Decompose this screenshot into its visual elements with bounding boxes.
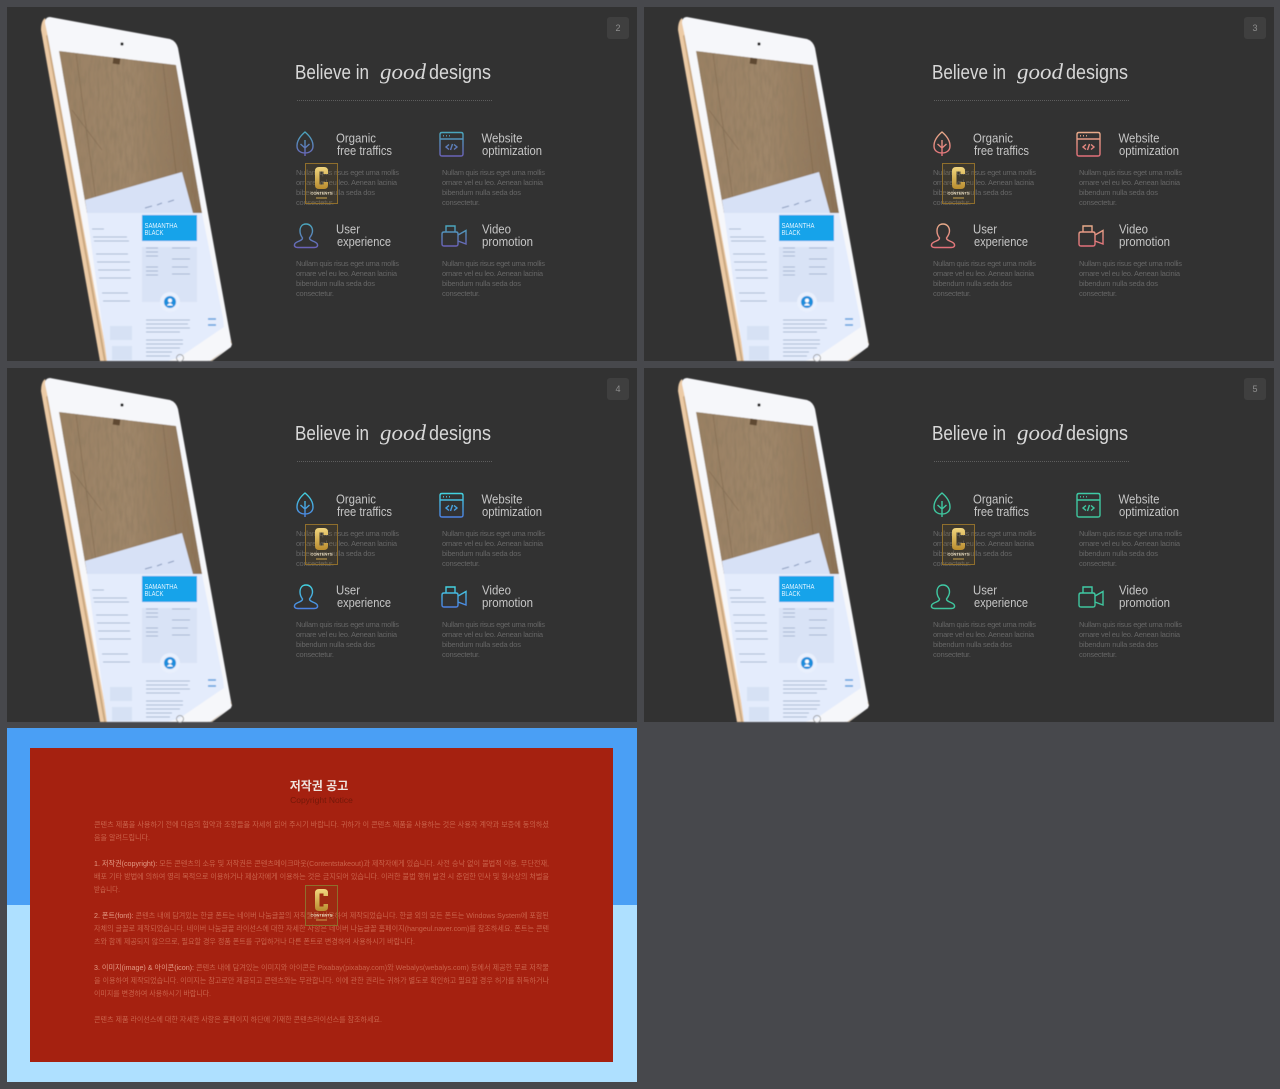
watermark: CONTENTS [948, 190, 970, 196]
icon: video camera [442, 226, 466, 246]
label: user experience: User [336, 222, 361, 236]
page number [1244, 378, 1266, 400]
label: user experience: User [973, 222, 998, 236]
tablet mockup: SAMANTHA [782, 584, 815, 591]
tablet mockup [678, 378, 869, 722]
description: consectetur. [1079, 198, 1117, 207]
notice text: 받습니다. [94, 885, 120, 894]
description: Nullam quis risus eget urna mollis [296, 620, 399, 629]
icon: user [294, 585, 318, 608]
description: ornare vel eu leo. Aenean lacinia [933, 178, 1035, 187]
description: bibendum nulla seda dos [296, 549, 375, 558]
notice text [94, 820, 549, 1024]
label: website optimization: optimization [482, 143, 542, 158]
page number: 5 [1252, 384, 1258, 394]
icon: user [931, 585, 955, 608]
description: consectetur. [296, 198, 334, 207]
icon: browser code [1077, 494, 1100, 517]
label: website optimization: optimization [482, 504, 542, 519]
watermark: CONTENTS [310, 552, 333, 556]
icon: browser code [1077, 132, 1100, 156]
tablet mockup: SAMANTHA [144, 223, 178, 230]
watermark: CONTENTS [948, 552, 970, 556]
page number [1244, 17, 1266, 39]
description: bibendum nulla seda dos [933, 188, 1012, 197]
icon: browser code [440, 494, 463, 517]
notice text: 1. 저작권(copyright): 모든 콘텐츠의 소유 및 저작권은 콘텐츠메이크마웃(Contentstakeout)과 제작자에게 있습니다. 사전 승낙 없이 불법적 이용, 무단전재, [94, 859, 549, 868]
page number [607, 378, 629, 400]
label: website optimization: optimization [1119, 143, 1179, 158]
watermark [306, 164, 338, 204]
label: organic free traffics: free traffics [337, 504, 392, 519]
heading: Believe in [295, 62, 369, 84]
description: consectetur. [1079, 650, 1117, 659]
icon: user [931, 224, 955, 248]
description: Nullam quis risus eget urna mollis [442, 168, 545, 177]
description: ornare vel eu leo. Aenean lacinia [442, 630, 544, 639]
description: bibendum nulla seda dos [933, 640, 1012, 649]
icon: leaf [934, 132, 950, 156]
tablet mockup [41, 17, 232, 362]
description: consectetur. [296, 289, 334, 298]
description: bibendum nulla seda dos [1079, 279, 1158, 288]
description: consectetur. [933, 650, 971, 659]
heading: designs [1066, 62, 1128, 84]
description: Nullam quis risus eget urna mollis [1079, 168, 1182, 177]
label: video promotion: promotion [482, 234, 533, 249]
description: consectetur. [1079, 289, 1117, 298]
description: Nullam quis risus eget urna mollis [1079, 620, 1182, 629]
description: Nullam quis risus eget urna mollis [933, 168, 1036, 177]
description: bibendum nulla seda dos [1079, 640, 1158, 649]
icon: leaf [297, 493, 313, 517]
icon: leaf [934, 493, 950, 517]
icon: video camera [1079, 226, 1103, 246]
label: user experience: experience [974, 595, 1028, 610]
tablet mockup: BLACK [782, 230, 801, 237]
description: Nullam quis risus eget urna mollis [296, 529, 399, 538]
description: consectetur. [933, 198, 971, 207]
tablet mockup: BLACK [144, 591, 164, 598]
page number [607, 17, 629, 39]
label: organic free traffics: free traffics [337, 143, 392, 158]
subtitle: Copyright Notice [290, 795, 353, 805]
description: ornare vel eu leo. Aenean lacinia [442, 539, 544, 548]
watermark: CONTENTS [310, 190, 333, 196]
tablet mockup: SAMANTHA [782, 223, 815, 230]
description: bibendum nulla seda dos [296, 279, 375, 288]
description: Nullam quis risus eget urna mollis [1079, 529, 1182, 538]
label: organic free traffics: Organic [336, 492, 376, 506]
description: bibendum nulla seda dos [296, 188, 375, 197]
description: bibendum nulla seda dos [1079, 549, 1158, 558]
label: user experience: User [973, 582, 998, 598]
page number: 4 [615, 384, 621, 394]
description: consectetur. [1079, 559, 1117, 568]
description: ornare vel eu leo. Aenean lacinia [933, 269, 1035, 278]
description: ornare vel eu leo. Aenean lacinia [1079, 539, 1181, 548]
tablet mockup [41, 378, 232, 722]
label: website optimization: Website [1118, 130, 1160, 146]
heading: designs [1066, 423, 1128, 445]
description: consectetur. [933, 559, 971, 568]
description: bibendum nulla seda dos [442, 279, 521, 288]
heading: good [380, 59, 427, 84]
label: website optimization: optimization [1119, 504, 1179, 519]
title: 저작권 공고 [290, 778, 348, 793]
description: Nullam quis risus eget urna mollis [442, 620, 545, 629]
heading: Believe in [295, 423, 369, 445]
notice text: 3. 이미지(image) & 아이콘(icon): 콘텐츠 내에 담겨있는 이미지와 아이콘은 Pixabay(pixabay.com)와 Webalys(webalys.com) 등에서 제공한 무료 저작물 [94, 963, 549, 972]
description: Nullam quis risus eget urna mollis [442, 529, 545, 538]
label: video promotion: promotion [1119, 234, 1170, 249]
heading [295, 420, 491, 445]
tablet mockup: SAMANTHA [144, 584, 178, 591]
description: bibendum nulla seda dos [442, 640, 521, 649]
heading: good [1017, 59, 1064, 84]
watermark: CONTENTS [310, 912, 333, 918]
description: ornare vel eu leo. Aenean lacinia [296, 539, 398, 548]
heading: good [1017, 420, 1064, 445]
description: consectetur. [442, 289, 480, 298]
icon: leaf [297, 132, 313, 156]
watermark [942, 524, 974, 564]
panel: copyright notice [7, 728, 637, 1082]
description: Nullam quis risus eget urna mollis [296, 168, 399, 177]
description: ornare vel eu leo. Aenean lacinia [296, 630, 398, 639]
label: website optimization: Website [482, 492, 522, 506]
icon: video camera [1079, 587, 1103, 607]
heading [932, 420, 1128, 445]
label: video promotion: promotion [1119, 595, 1170, 610]
heading: designs [429, 62, 491, 84]
tablet mockup [678, 17, 869, 362]
description: consectetur. [933, 289, 971, 298]
label: video promotion: Video [1119, 582, 1148, 598]
description: Nullam quis risus eget urna mollis [933, 529, 1036, 538]
label: organic free traffics: free traffics [974, 504, 1029, 519]
tablet mockup: BLACK [144, 230, 164, 237]
description: Nullam quis risus eget urna mollis [296, 259, 399, 268]
page number: 2 [615, 23, 621, 33]
notice text: 콘텐츠 제품을 사용하기 전에 다음의 협약과 조항들을 자세히 읽어 주시기 바랍니다. 귀하가 이 콘텐츠 제품을 사용하는 것은 사용자 계약과 보증에 동의하셨 [94, 820, 549, 829]
heading: designs [429, 423, 491, 445]
panel: slide 2 [7, 7, 637, 362]
label: website optimization: Website [482, 130, 522, 146]
heading [932, 59, 1128, 84]
label: video promotion: Video [1119, 222, 1148, 236]
label: organic free traffics: free traffics [974, 143, 1029, 158]
icon: user [294, 224, 318, 248]
label: organic free traffics: Organic [973, 492, 1013, 506]
description: ornare vel eu leo. Aenean lacinia [1079, 178, 1181, 187]
notice text: 2. 폰트(font): 콘텐츠 내에 담겨있는 한글 폰트는 네이버 나눔글꼴의 저작물을 사용하여 제작되었습니다. 한글 외의 모든 폰트는 Windows System에 포함된 [94, 911, 549, 920]
notice text: 배포 기타 방법에 의하여 영리 목적으로 이용하거나 제삼자에게 이용하는 것은 금지되어 있습니다. 이러한 불법 행위 발견 시 준엄한 민사 및 형사상의 처벌을 [94, 872, 549, 881]
tablet mockup: BLACK [782, 591, 801, 598]
label: user experience: experience [337, 234, 391, 249]
description: ornare vel eu leo. Aenean lacinia [442, 269, 544, 278]
description: ornare vel eu leo. Aenean lacinia [1079, 630, 1181, 639]
panel: slide 3 [644, 7, 1274, 362]
label: video promotion: promotion [482, 595, 533, 610]
icon: video camera [442, 587, 466, 607]
description: ornare vel eu leo. Aenean lacinia [296, 178, 398, 187]
heading [295, 59, 491, 84]
notice text: 자체의 글꼴로 제작되었습니다. 네이버 나눔글꼴 라이선스에 대한 자세한 사항은 네이버 나눔글꼴 홈페이지(hangeul.naver.com)를 참조하세요. 폰트는 콘텐 [94, 924, 549, 933]
description: ornare vel eu leo. Aenean lacinia [296, 269, 398, 278]
description: bibendum nulla seda dos [933, 279, 1012, 288]
panel: slide 5 [644, 368, 1274, 722]
heading: Believe in [932, 62, 1006, 84]
icon: browser code [440, 132, 463, 156]
label: organic free traffics: Organic [336, 130, 376, 146]
notice text: 이미지를 변경하여 사용하시기 바랍니다. [94, 989, 211, 998]
description: bibendum nulla seda dos [442, 549, 521, 558]
notice text: 콘텐츠 제품 라이선스에 대한 자세한 사항은 홈페이지 하단에 기재한 콘텐츠라이선스를 참조하세요. [94, 1015, 382, 1024]
description: consectetur. [442, 559, 480, 568]
notice text: 을 이용하여 제작되었습니다. 이미지는 참고로만 제공되고 콘텐츠와는 무관합니다. 이에 관한 권리는 귀하가 별도로 확인하고 필요할 경우 허가를 취득하거나 [94, 976, 549, 985]
label: user experience: User [336, 582, 361, 598]
description: bibendum nulla seda dos [933, 549, 1012, 558]
description: Nullam quis risus eget urna mollis [442, 259, 545, 268]
description: ornare vel eu leo. Aenean lacinia [1079, 269, 1181, 278]
description: bibendum nulla seda dos [442, 188, 521, 197]
heading: good [380, 420, 427, 445]
description: consectetur. [442, 198, 480, 207]
watermark [942, 164, 974, 204]
heading: Believe in [932, 423, 1006, 445]
description: ornare vel eu leo. Aenean lacinia [933, 630, 1035, 639]
panel: slide 4 [7, 368, 637, 722]
label: video promotion: Video [482, 222, 511, 236]
page number: 3 [1252, 23, 1258, 33]
description: consectetur. [296, 559, 334, 568]
label: organic free traffics: Organic [973, 130, 1013, 146]
watermark [306, 886, 338, 926]
description: Nullam quis risus eget urna mollis [1079, 259, 1182, 268]
label: user experience: experience [974, 234, 1028, 249]
watermark [306, 524, 338, 564]
label: user experience: experience [337, 595, 391, 610]
notice text: 음을 알려드립니다. [94, 833, 150, 842]
description: ornare vel eu leo. Aenean lacinia [442, 178, 544, 187]
description: Nullam quis risus eget urna mollis [933, 259, 1036, 268]
description: ornare vel eu leo. Aenean lacinia [933, 539, 1035, 548]
notice text: 츠와 함께 제공되지 않으므로, 필요할 경우 정품 폰트를 구입하거나 다른 폰트로 변경하여 사용하시기 바랍니다. [94, 937, 415, 946]
description: bibendum nulla seda dos [1079, 188, 1158, 197]
label: video promotion: Video [482, 582, 511, 598]
label: website optimization: Website [1118, 492, 1160, 506]
description: bibendum nulla seda dos [296, 640, 375, 649]
description: Nullam quis risus eget urna mollis [933, 620, 1036, 629]
description: consectetur. [296, 650, 334, 659]
description: consectetur. [442, 650, 480, 659]
